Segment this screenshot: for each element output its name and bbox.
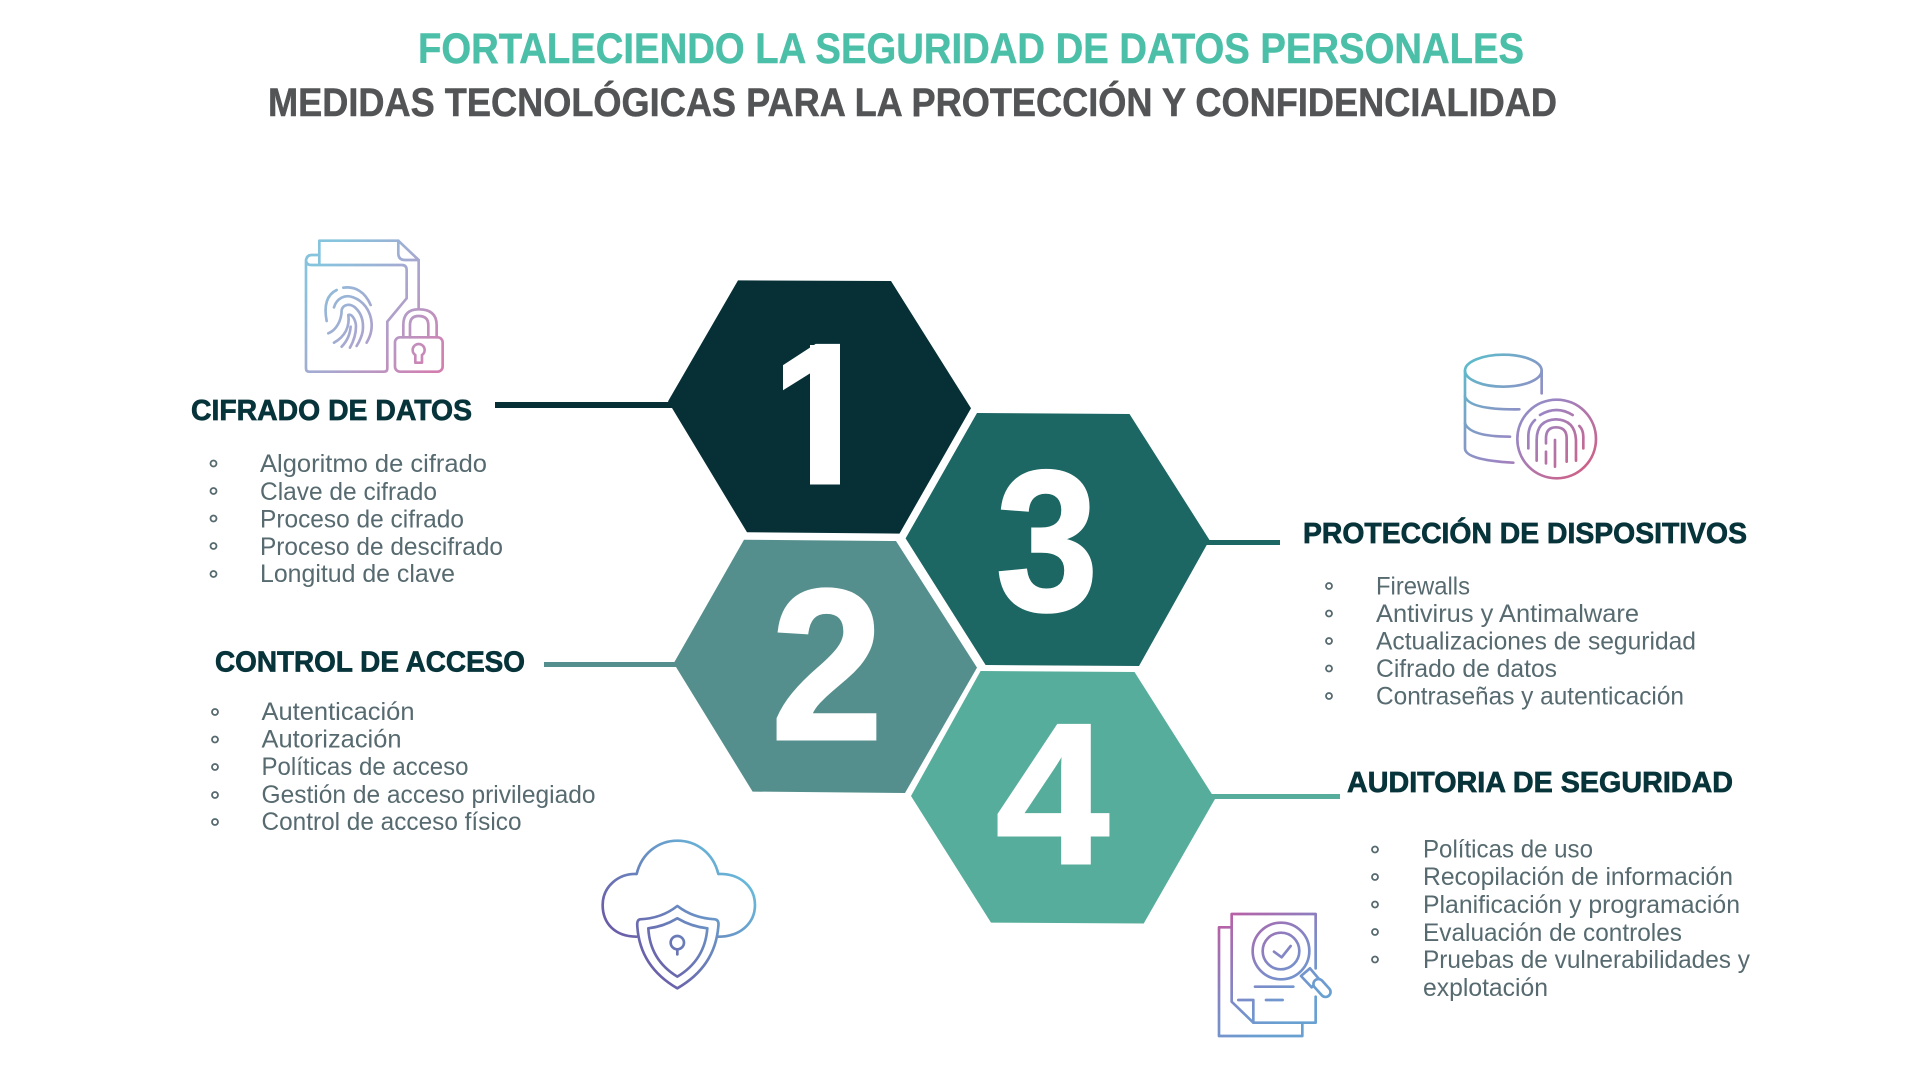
icon: database with fingerprint bbox=[1465, 355, 1596, 478]
heading: control de acceso: CONTROL DE ACCESO bbox=[215, 646, 525, 678]
heading: cifrado de datos: CIFRADO DE DATOS bbox=[191, 395, 472, 427]
icon: cloud with shield bbox=[603, 841, 755, 988]
connector line 4 bbox=[1210, 794, 1340, 799]
heading: protección de dispositivos: PROTECCIÓN DE DISPOSITIVOS bbox=[1303, 516, 1747, 550]
hexagon 3: 3 bbox=[996, 430, 1098, 653]
list: protección de dispositivos: Antivirus y Antimalware bbox=[1376, 600, 1639, 628]
list: protección de dispositivos: Contraseñas y autenticación bbox=[1376, 682, 1684, 710]
hexagon 4: 4 bbox=[996, 683, 1109, 906]
list: auditoria de seguridad: Recopilación de información bbox=[1423, 863, 1733, 891]
list: cifrado de datos: Clave de cifrado bbox=[260, 478, 437, 506]
icon: audit document with magnifier bbox=[1219, 914, 1333, 1036]
list: auditoria de seguridad: Planificación y programación bbox=[1423, 891, 1740, 919]
list: control de acceso bbox=[212, 698, 596, 836]
list: cifrado de datos: Algoritmo de cifrado bbox=[260, 450, 487, 478]
panel: protección de dispositivos bbox=[1303, 516, 1747, 710]
list: protección de dispositivos: Firewalls bbox=[1376, 572, 1470, 600]
hexagon 2 bbox=[674, 540, 977, 793]
hexagon 1: 1 bbox=[768, 303, 879, 526]
list: protección de dispositivos: Actualizaciones de seguridad bbox=[1376, 628, 1696, 656]
list: protección de dispositivos bbox=[1326, 572, 1696, 710]
hexagon 2: 2 bbox=[771, 544, 883, 785]
list: cifrado de datos: Proceso de cifrado bbox=[260, 506, 464, 534]
title: FORTALECIENDO LA SEGURIDAD DE DATOS PERSONALES bbox=[418, 25, 1524, 73]
heading: auditoria de seguridad: AUDITORIA DE SEGURIDAD bbox=[1347, 767, 1733, 799]
list: control de acceso: Políticas de acceso bbox=[262, 753, 468, 781]
list: cifrado de datos bbox=[210, 450, 503, 588]
icon: fingerprint document with padlock bbox=[306, 241, 443, 372]
list: auditoria de seguridad: Políticas de uso bbox=[1423, 836, 1593, 864]
list: cifrado de datos: Longitud de clave bbox=[260, 560, 455, 588]
list: control de acceso: Autenticación bbox=[262, 698, 414, 726]
list: control de acceso: Control de acceso físico bbox=[262, 808, 522, 836]
hexagon 4 bbox=[911, 671, 1215, 924]
hexagon 1 bbox=[668, 280, 971, 534]
list: auditoria de seguridad bbox=[1372, 836, 1750, 1002]
list: auditoria de seguridad: explotación bbox=[1423, 974, 1548, 1002]
connector line 3 bbox=[1205, 540, 1280, 545]
panel: auditoria de seguridad bbox=[1347, 767, 1750, 1002]
list: control de acceso: Autorización bbox=[262, 726, 402, 754]
list: cifrado de datos: Proceso de descifrado bbox=[260, 533, 503, 561]
subtitle: MEDIDAS TECNOLÓGICAS PARA LA PROTECCIÓN Y CONFIDENCIALIDAD bbox=[268, 79, 1557, 125]
connector line 1 bbox=[495, 402, 675, 408]
connector line 2 bbox=[544, 662, 679, 667]
list: auditoria de seguridad: Evaluación de controles bbox=[1423, 919, 1682, 947]
panel: cifrado de datos bbox=[191, 395, 503, 588]
list: protección de dispositivos: Cifrado de datos bbox=[1376, 655, 1557, 683]
list: control de acceso: Gestión de acceso privilegiado bbox=[262, 781, 596, 809]
panel: control de acceso bbox=[212, 646, 596, 836]
hexagon 3 bbox=[906, 413, 1210, 666]
list: auditoria de seguridad: Pruebas de vulnerabilidades y bbox=[1423, 946, 1750, 974]
